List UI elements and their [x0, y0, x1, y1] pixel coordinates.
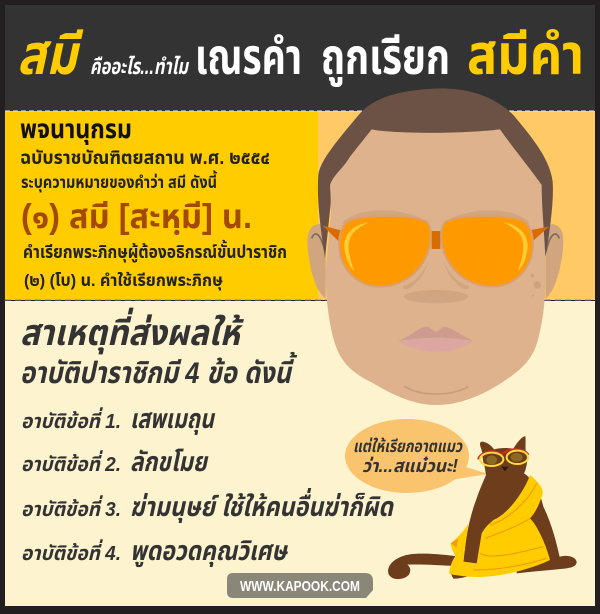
left lens — [339, 216, 431, 287]
illustration: cat monk — [388, 436, 577, 579]
list: four offences: ลักขโมย — [130, 447, 209, 477]
heading: causes: อาบัติปาราชิกมี 4 ข้อ ดังนี้ — [20, 351, 298, 390]
hind leg — [451, 556, 577, 579]
heading: causes — [20, 307, 298, 390]
face — [326, 129, 546, 405]
speech bubble — [345, 419, 488, 493]
dictionary text block: ระบุความหมายของคำว่า สมี ดังนี้ — [21, 170, 218, 193]
right ear — [546, 224, 563, 298]
dictionary text block: (๒) (โบ) น. คำใช้เรียกพระภิกษุ — [24, 271, 223, 291]
cat glasses — [478, 449, 528, 466]
title — [17, 23, 584, 87]
nose — [404, 290, 468, 303]
list: four offences: อาบัติข้อที่ 1. — [21, 407, 121, 433]
list: four offences — [21, 404, 395, 568]
hair — [318, 88, 553, 258]
title: คืออะไร...ทำไม — [90, 54, 189, 79]
panel: cream lower background — [5, 301, 595, 606]
website badge: WWW.KAPOOK.COM — [240, 578, 360, 595]
title: สมีคำ — [467, 23, 584, 86]
list: four offences: อาบัติข้อที่ 2. — [21, 450, 121, 476]
panel: dictionary background — [5, 111, 595, 300]
lens highlights — [344, 222, 368, 271]
list: four offences: อาบัติข้อที่ 4. — [21, 539, 121, 565]
lips — [398, 327, 473, 352]
cat body and head — [463, 436, 560, 567]
list: four offences: อาบัติข้อที่ 3. — [21, 495, 121, 521]
speech bubble: แต่ให้เรียกอาตแมว — [353, 437, 463, 456]
robe folds — [473, 483, 547, 570]
tail — [388, 554, 455, 579]
title: ถูกเรียก — [321, 29, 450, 87]
title: เณรคำ — [195, 29, 302, 85]
robe left fold — [451, 538, 458, 547]
dictionary text block: คำเรียกพระภิกษุผู้ต้องอธิกรณ์ขั้นปาราชิก — [23, 240, 287, 263]
title: สมี — [17, 23, 84, 86]
dictionary text block: ฉบับราชบัณฑิตยสถาน พ.ศ. ๒๕๕๔ — [20, 148, 270, 169]
cat eyes — [486, 453, 523, 465]
heading: causes: สาเหตุที่ส่งผลให้ — [20, 307, 244, 355]
dictionary text block: (๑) สมี [สะหฺมี] น. — [21, 198, 252, 236]
chin line — [404, 386, 469, 394]
header band — [5, 5, 595, 111]
dictionary text block: พจนานุกรม — [20, 114, 132, 145]
left ear — [307, 224, 326, 298]
glasses arms and bridge — [323, 226, 549, 249]
illustration: monk face — [307, 88, 563, 405]
list: four offences: พูดอวดคุณวิเศษ — [130, 536, 289, 568]
website badge — [227, 573, 373, 598]
list: four offences: ฆ่ามนุษย์ ใช้ให้คนอื่นฆ่าก็ผิด — [130, 488, 395, 524]
cat nose — [501, 467, 509, 471]
right lens — [441, 216, 533, 287]
brow shadows — [343, 210, 425, 232]
ear details — [312, 234, 559, 252]
nose side shadows — [403, 262, 428, 289]
moles — [530, 274, 541, 297]
list: four offences: เสพเมถุน — [130, 404, 216, 436]
speech bubble: ว่า...สแม๋วนะ! — [362, 456, 458, 476]
robe — [449, 475, 550, 577]
dictionary text block — [20, 114, 287, 291]
